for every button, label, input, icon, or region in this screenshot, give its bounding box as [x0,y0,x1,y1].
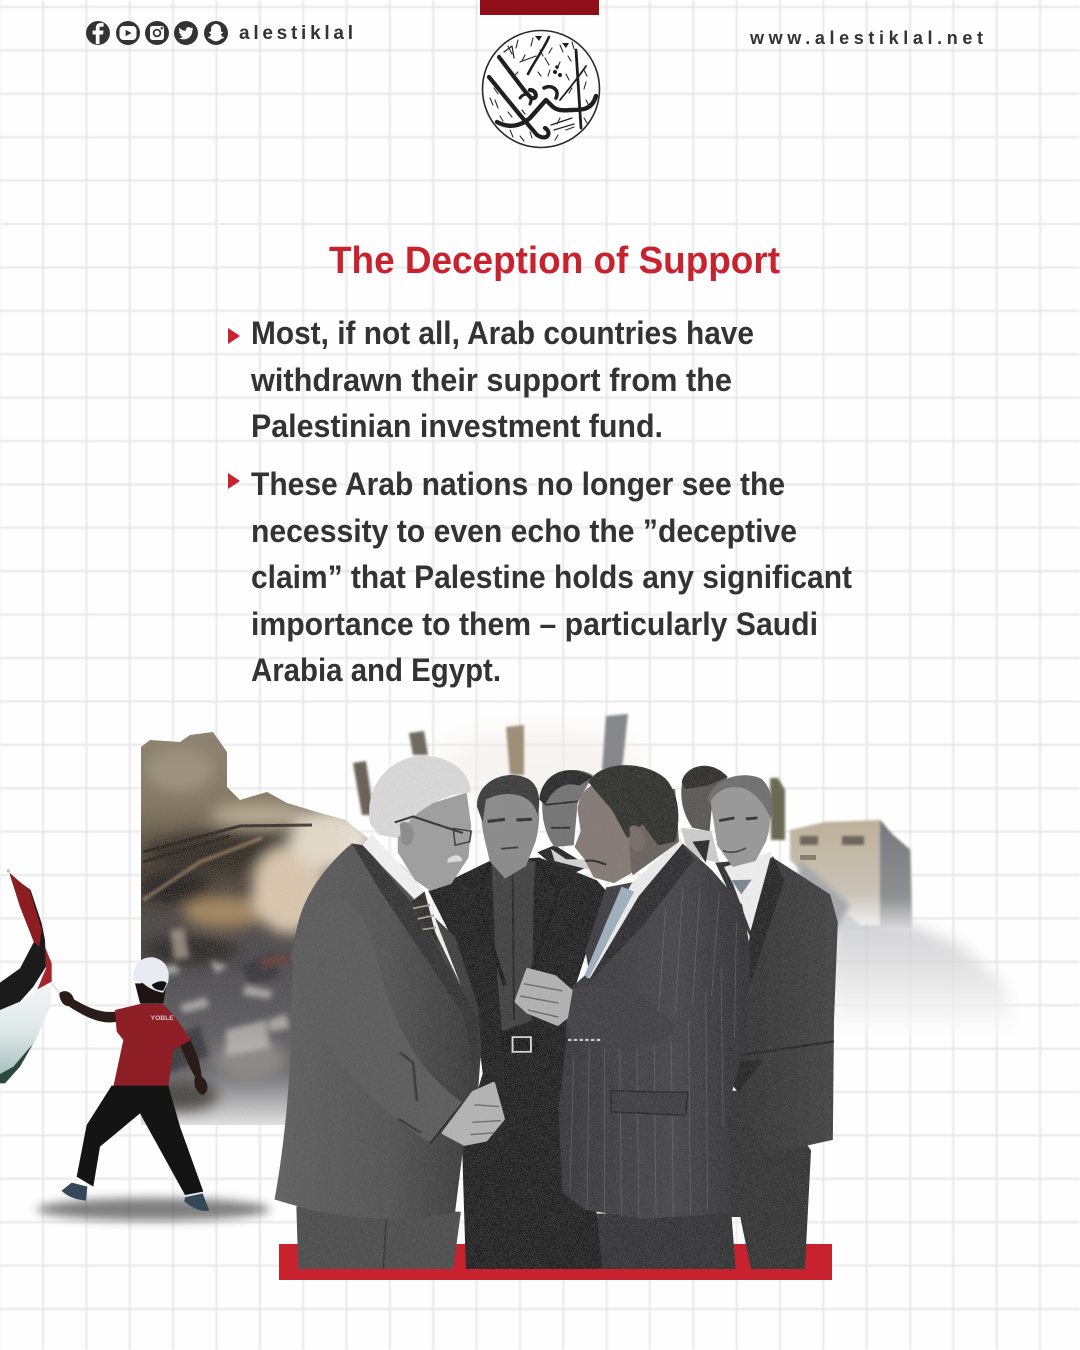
man on far right [708,775,838,1269]
brand handle: alestiklal [239,23,353,44]
icon: instagram [145,21,169,45]
dust and pillars [353,714,640,815]
man in black suit [428,775,606,1269]
top red tab [480,0,599,15]
man in pinstripe suit, right centre [516,765,751,1269]
man in grey suit, left [275,756,503,1269]
palestinian flag [0,869,60,1083]
bullet: withdrawn support [228,315,754,444]
bullet marker [228,473,240,489]
man behind right [681,766,728,863]
line 2: necessity to even echo the ”deceptive [251,513,797,549]
line 1: These Arab nations no longer see the [251,466,785,502]
man behind centre [537,770,593,877]
rubble backdrop left [139,725,421,1125]
icon: facebook [86,21,110,45]
child figure [59,957,209,1211]
group of men [275,756,838,1269]
logo emblem [482,30,600,148]
line 4: importance to them – particularly Saudi [251,606,818,642]
child with flag [0,869,270,1221]
red base bar [279,1244,832,1280]
ruined building right [770,778,1015,1030]
line 3: claim” that Palestine holds any significant [251,559,852,595]
social icons [86,21,228,45]
heading: The Deception of Support [329,240,780,282]
line 3: Palestinian investment fund. [251,408,663,444]
child figure: YOBLE [151,1015,174,1022]
bullet marker [228,328,240,344]
website url: www.alestiklal.net [749,28,983,48]
line 1: Most, if not all, Arab countries have [251,315,754,351]
icon: snapchat [204,21,228,45]
icon: youtube [116,21,140,45]
foot of red bar [279,1269,832,1280]
ground shadow [37,1198,270,1221]
line 2: withdrawn their support from the [250,362,732,398]
bullet: no longer echo the claim [228,466,852,688]
line 5: Arabia and Egypt. [251,652,501,688]
icon: twitter [174,21,198,45]
